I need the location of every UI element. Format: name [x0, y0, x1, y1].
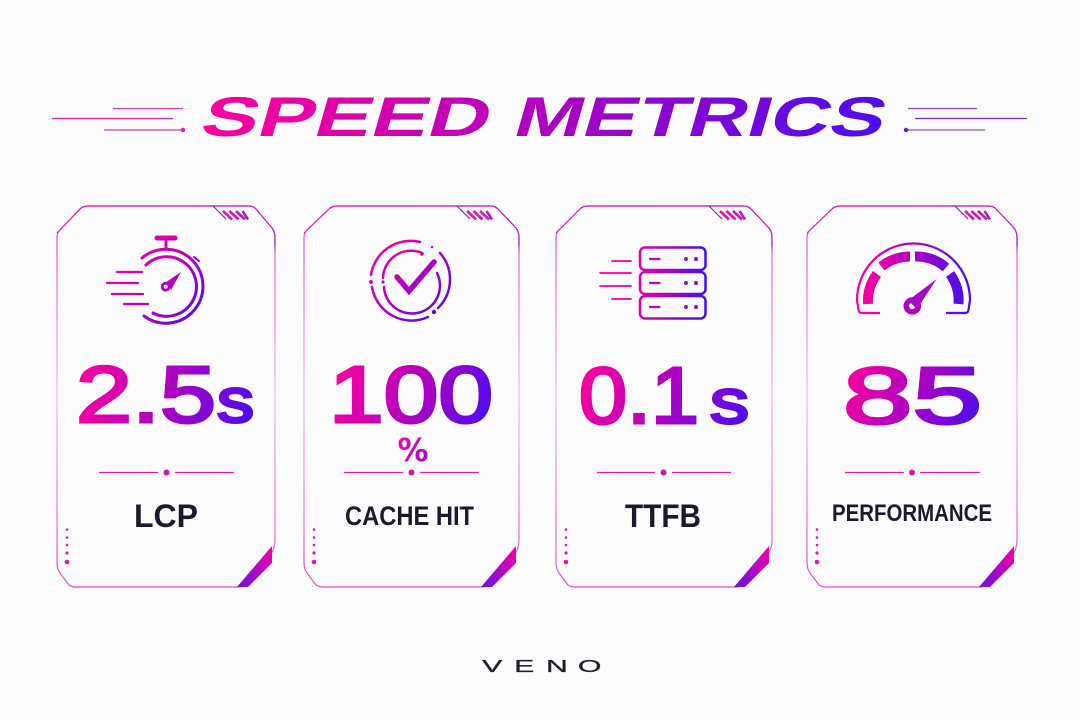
panel: cache hit [304, 206, 519, 587]
side dots [564, 528, 568, 564]
divider [597, 470, 731, 476]
label: CACHE HIT [345, 501, 474, 531]
side dots [312, 528, 316, 564]
metric value [579, 351, 749, 440]
divider [344, 470, 479, 476]
card outline [556, 206, 772, 587]
card outline [807, 206, 1017, 587]
corner accent [237, 546, 272, 587]
title: SPEED [194, 86, 500, 149]
divider [99, 470, 234, 476]
corner stripes [965, 211, 990, 220]
icon: gauge [857, 243, 970, 313]
panel: performance [807, 206, 1017, 587]
metric value: 85 [843, 351, 982, 440]
percent sign: % [398, 431, 428, 469]
metric value: 100 [329, 350, 493, 439]
brand logo: VENO [482, 656, 601, 676]
corner stripes [223, 211, 248, 220]
icon: check circle [369, 241, 450, 321]
corner accent [734, 546, 769, 587]
icon: stopwatch [107, 238, 203, 323]
icon: server [600, 248, 706, 318]
metric value: 0.1 [579, 351, 699, 440]
label: LCP [134, 498, 198, 534]
divider [845, 470, 980, 476]
side dots [65, 528, 69, 564]
label: PERFORMANCE [832, 500, 992, 527]
corner stripes [467, 211, 492, 220]
left speed lines [52, 108, 185, 132]
metric value: s [710, 368, 749, 437]
right speed lines [904, 108, 1027, 132]
corner accent [979, 546, 1014, 587]
card outline [57, 206, 275, 587]
card outline [304, 206, 519, 587]
panel: TTFB [556, 206, 772, 587]
metric value [76, 350, 254, 439]
title [194, 86, 895, 149]
corner stripes [720, 211, 745, 220]
panel: LCP [57, 206, 275, 587]
metric value: s [217, 367, 254, 436]
metric value: 2.5 [76, 350, 216, 439]
title: METRICS [507, 86, 895, 149]
corner accent [481, 546, 516, 587]
label: TTFB [625, 498, 701, 534]
side dots [815, 528, 819, 564]
